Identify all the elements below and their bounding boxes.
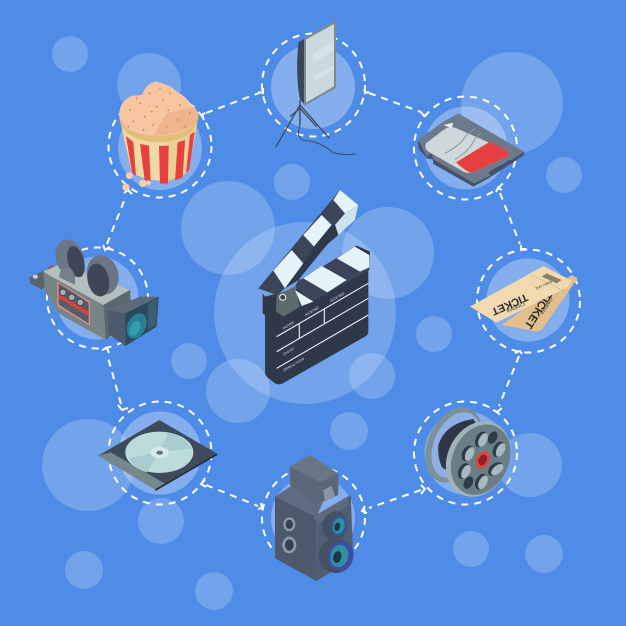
board labels: SCENE: [305, 305, 319, 318]
board labels: HOPE: [283, 320, 294, 331]
icon: CD in case: [98, 420, 217, 491]
icon halo discs: [56, 45, 570, 560]
icon: film camera: [29, 236, 159, 346]
icon: popcorn bucket: [119, 82, 198, 191]
dashed ring network: [47, 34, 580, 570]
board labels: SOUND: [330, 291, 344, 304]
icon: central clapperboard: [258, 190, 370, 384]
icon: film reel: [414, 398, 523, 508]
icon: SD memory card: [418, 113, 524, 187]
icon: softbox light: [276, 20, 355, 155]
back ticket: CINEMA: [538, 296, 554, 316]
back ticket: TICKET: [522, 289, 553, 330]
background bubbles: [42, 36, 582, 610]
board labels: [283, 291, 344, 373]
front ticket: CINEMA: [505, 300, 525, 314]
board body: [263, 270, 368, 384]
front ticket: ADMIT ONE: [534, 279, 553, 291]
board lines: [277, 283, 368, 368]
upper stick: [258, 190, 358, 295]
board labels: DATE: [283, 346, 294, 357]
hinge plate: [276, 287, 300, 317]
board labels: DIRECTOR: [283, 356, 305, 373]
icon: twin-lens camera: [275, 455, 357, 581]
connector chevrons: [102, 88, 526, 513]
icon: cinema tickets: [470, 266, 578, 332]
front ticket: TICKET: [489, 291, 530, 318]
front ticket: [470, 266, 572, 323]
back ticket: [502, 275, 578, 332]
lower stick stripes: [295, 247, 370, 302]
